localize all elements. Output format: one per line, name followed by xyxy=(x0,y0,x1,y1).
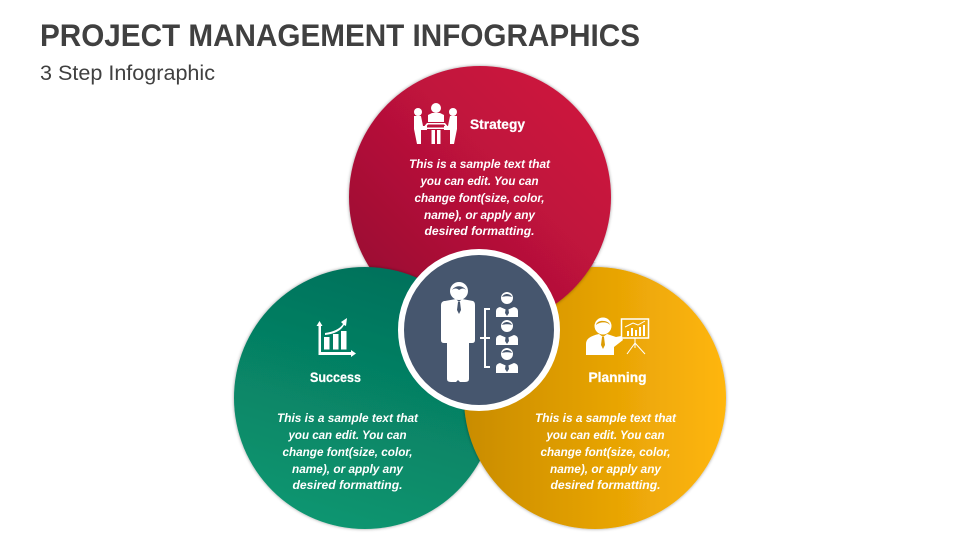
panel: planning xyxy=(535,318,677,492)
circle: strategy background xyxy=(349,66,611,328)
icon: leader and team xyxy=(441,282,518,382)
text: strategy body xyxy=(409,157,551,238)
text: success body: desired formatting. xyxy=(292,478,402,492)
text: strategy body: This is a sample text that xyxy=(409,157,551,171)
text: success body: change font(size, color, xyxy=(282,445,412,459)
text: planning body: change font(size, color, xyxy=(540,445,670,459)
text: planning body: you can edit. You can xyxy=(546,428,664,442)
text: strategy body: desired formatting. xyxy=(424,224,534,238)
center hub xyxy=(401,252,557,408)
icon: presenter with board xyxy=(586,318,648,355)
text: planning body: desired formatting. xyxy=(550,478,660,492)
text: planning body: This is a sample text that xyxy=(535,411,677,425)
icon: growth chart xyxy=(316,318,356,357)
icon: team member top xyxy=(496,292,518,317)
text: success body: This is a sample text that xyxy=(277,411,419,425)
circle: success background xyxy=(234,267,496,529)
text: strategy body: name), or apply any xyxy=(424,208,536,222)
text: success body: you can edit. You can xyxy=(288,428,406,442)
text: success body xyxy=(277,411,419,492)
text: planning body: name), or apply any xyxy=(550,462,662,476)
circle: planning background xyxy=(464,267,726,529)
text: success body: name), or apply any xyxy=(292,462,404,476)
subtitle: 3 Step Infographic xyxy=(40,62,215,85)
text: strategy body: you can edit. You can xyxy=(420,174,538,188)
icon: team member middle xyxy=(496,320,518,345)
text: planning body xyxy=(535,411,677,492)
heading: strategy: Strategy xyxy=(470,116,525,132)
overlap: strategy over planning xyxy=(540,262,596,306)
title: PROJECT MANAGEMENT INFOGRAPHICS xyxy=(40,17,640,53)
heading: planning: Planning xyxy=(588,369,646,385)
icon: meeting table xyxy=(414,103,457,144)
icon: team member bottom xyxy=(496,348,518,373)
panel: success xyxy=(277,318,419,492)
text: strategy body: change font(size, color, xyxy=(414,191,544,205)
panel: strategy xyxy=(409,103,551,238)
heading: success: Success xyxy=(310,369,361,385)
